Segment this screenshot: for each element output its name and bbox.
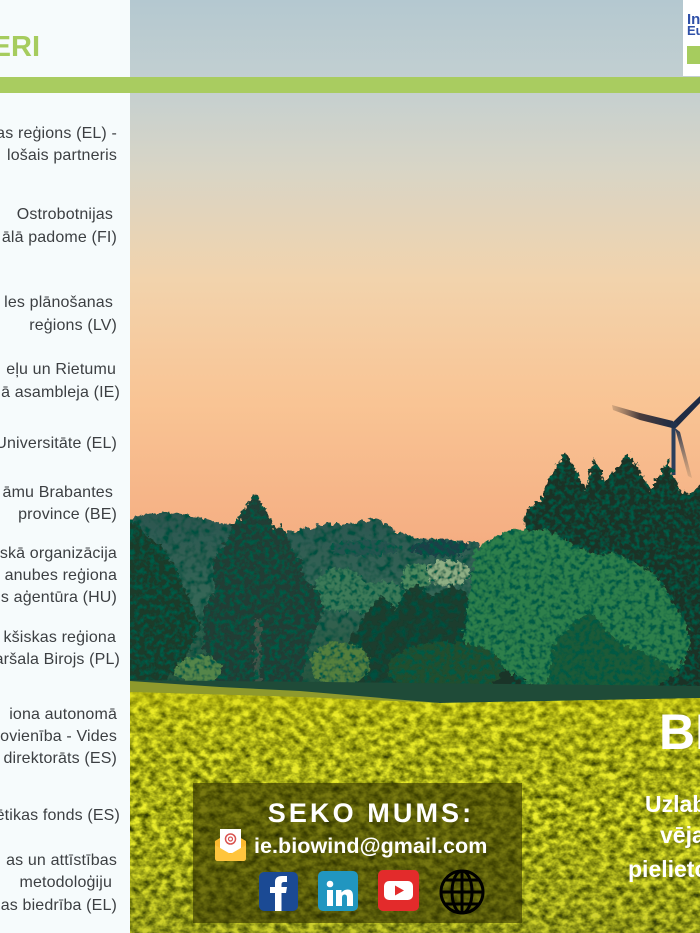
icon: wind turbine xyxy=(612,396,700,478)
partner 7: anubes reģiona xyxy=(5,566,117,584)
partner list xyxy=(0,124,120,914)
shaded lower foliage xyxy=(545,610,680,698)
partner 11: as un attīstības xyxy=(6,852,117,869)
pale mid-ground trees xyxy=(314,540,470,618)
dark conifer stand xyxy=(345,585,480,700)
partner 11: metodoloģiju xyxy=(19,873,112,891)
partner 7: skā organizācija xyxy=(0,545,117,562)
logo panel xyxy=(683,0,700,76)
hedge below the trees xyxy=(130,680,700,705)
rapeseed field xyxy=(130,690,700,933)
partner 6: āmu Brabantes xyxy=(3,484,113,501)
partner 2: ālā padome (FI) xyxy=(2,229,117,246)
partner 8: kšiskas reģiona xyxy=(3,629,116,646)
partner 9: direktorāts (ES) xyxy=(3,750,117,767)
logo panel: In xyxy=(687,11,700,28)
partner 3: reģions (LV) xyxy=(29,316,117,334)
partner 3: les plānošanas xyxy=(4,294,113,311)
icon: globe xyxy=(441,871,483,913)
partner 9: iona autonomā xyxy=(9,706,117,723)
partner 9: ovienība - Vides xyxy=(0,728,117,745)
icon: youtube xyxy=(378,870,419,911)
foreground bushes xyxy=(175,620,503,694)
background photo: sunset sky xyxy=(130,0,700,560)
left conifer xyxy=(125,520,201,690)
partner 11: as biedrība (EL) xyxy=(1,897,117,914)
icon: facebook xyxy=(259,872,298,911)
panel: partners xyxy=(0,0,130,933)
email address: ie.biowind@gmail.com xyxy=(254,834,487,858)
partner 6: province (BE) xyxy=(18,506,117,523)
icon: linkedin xyxy=(318,871,358,911)
dark forest backing xyxy=(130,585,700,705)
partner 4: ā asambleja (IE) xyxy=(1,384,120,401)
partner 4: eļu un Rietumu xyxy=(6,361,116,378)
partner 2: Ostrobotnijas xyxy=(17,206,113,223)
big green broadleaf tree xyxy=(463,530,690,695)
olive strip in front of the hedge xyxy=(130,681,440,703)
partner 7: s aģentūra (HU) xyxy=(1,588,117,606)
follow us heading: SEKO MUMS: xyxy=(268,798,474,828)
big conifer xyxy=(203,493,323,690)
panel: follow us xyxy=(193,783,522,923)
partner 1: lošais partneris xyxy=(7,147,117,164)
icon: email envelope xyxy=(215,829,246,861)
right dark tree line xyxy=(510,452,700,700)
distant forested hills xyxy=(130,512,480,700)
green header bar xyxy=(0,77,700,93)
